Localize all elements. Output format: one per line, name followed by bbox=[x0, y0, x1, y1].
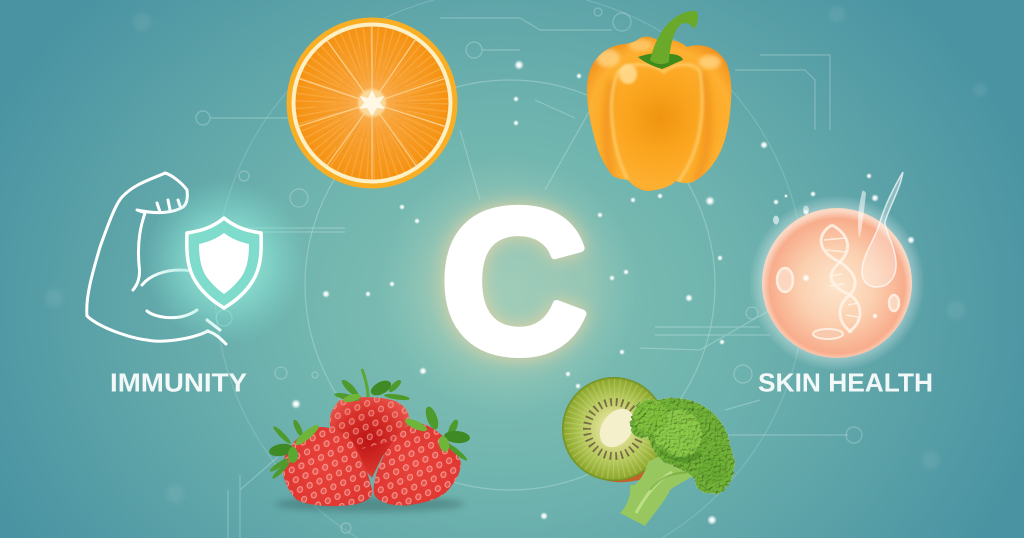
icon: strawberries bbox=[268, 369, 470, 512]
skin health cell icon bbox=[749, 172, 925, 371]
icon: kiwi slice bbox=[562, 377, 666, 482]
shield icon with glow bbox=[144, 180, 308, 344]
letter C: C bbox=[440, 167, 588, 396]
icon: orange slice bbox=[286, 18, 458, 188]
label: skin health: SKIN HEALTH bbox=[758, 368, 933, 398]
icon: yellow bell pepper bbox=[587, 11, 731, 191]
immunity flexed arm icon bbox=[87, 173, 226, 344]
label: immunity: IMMUNITY bbox=[110, 368, 247, 398]
circuit background lines bbox=[196, 0, 862, 538]
icon: broccoli bbox=[620, 398, 734, 526]
sparkle dots bbox=[291, 60, 768, 525]
center glow bbox=[380, 155, 640, 415]
